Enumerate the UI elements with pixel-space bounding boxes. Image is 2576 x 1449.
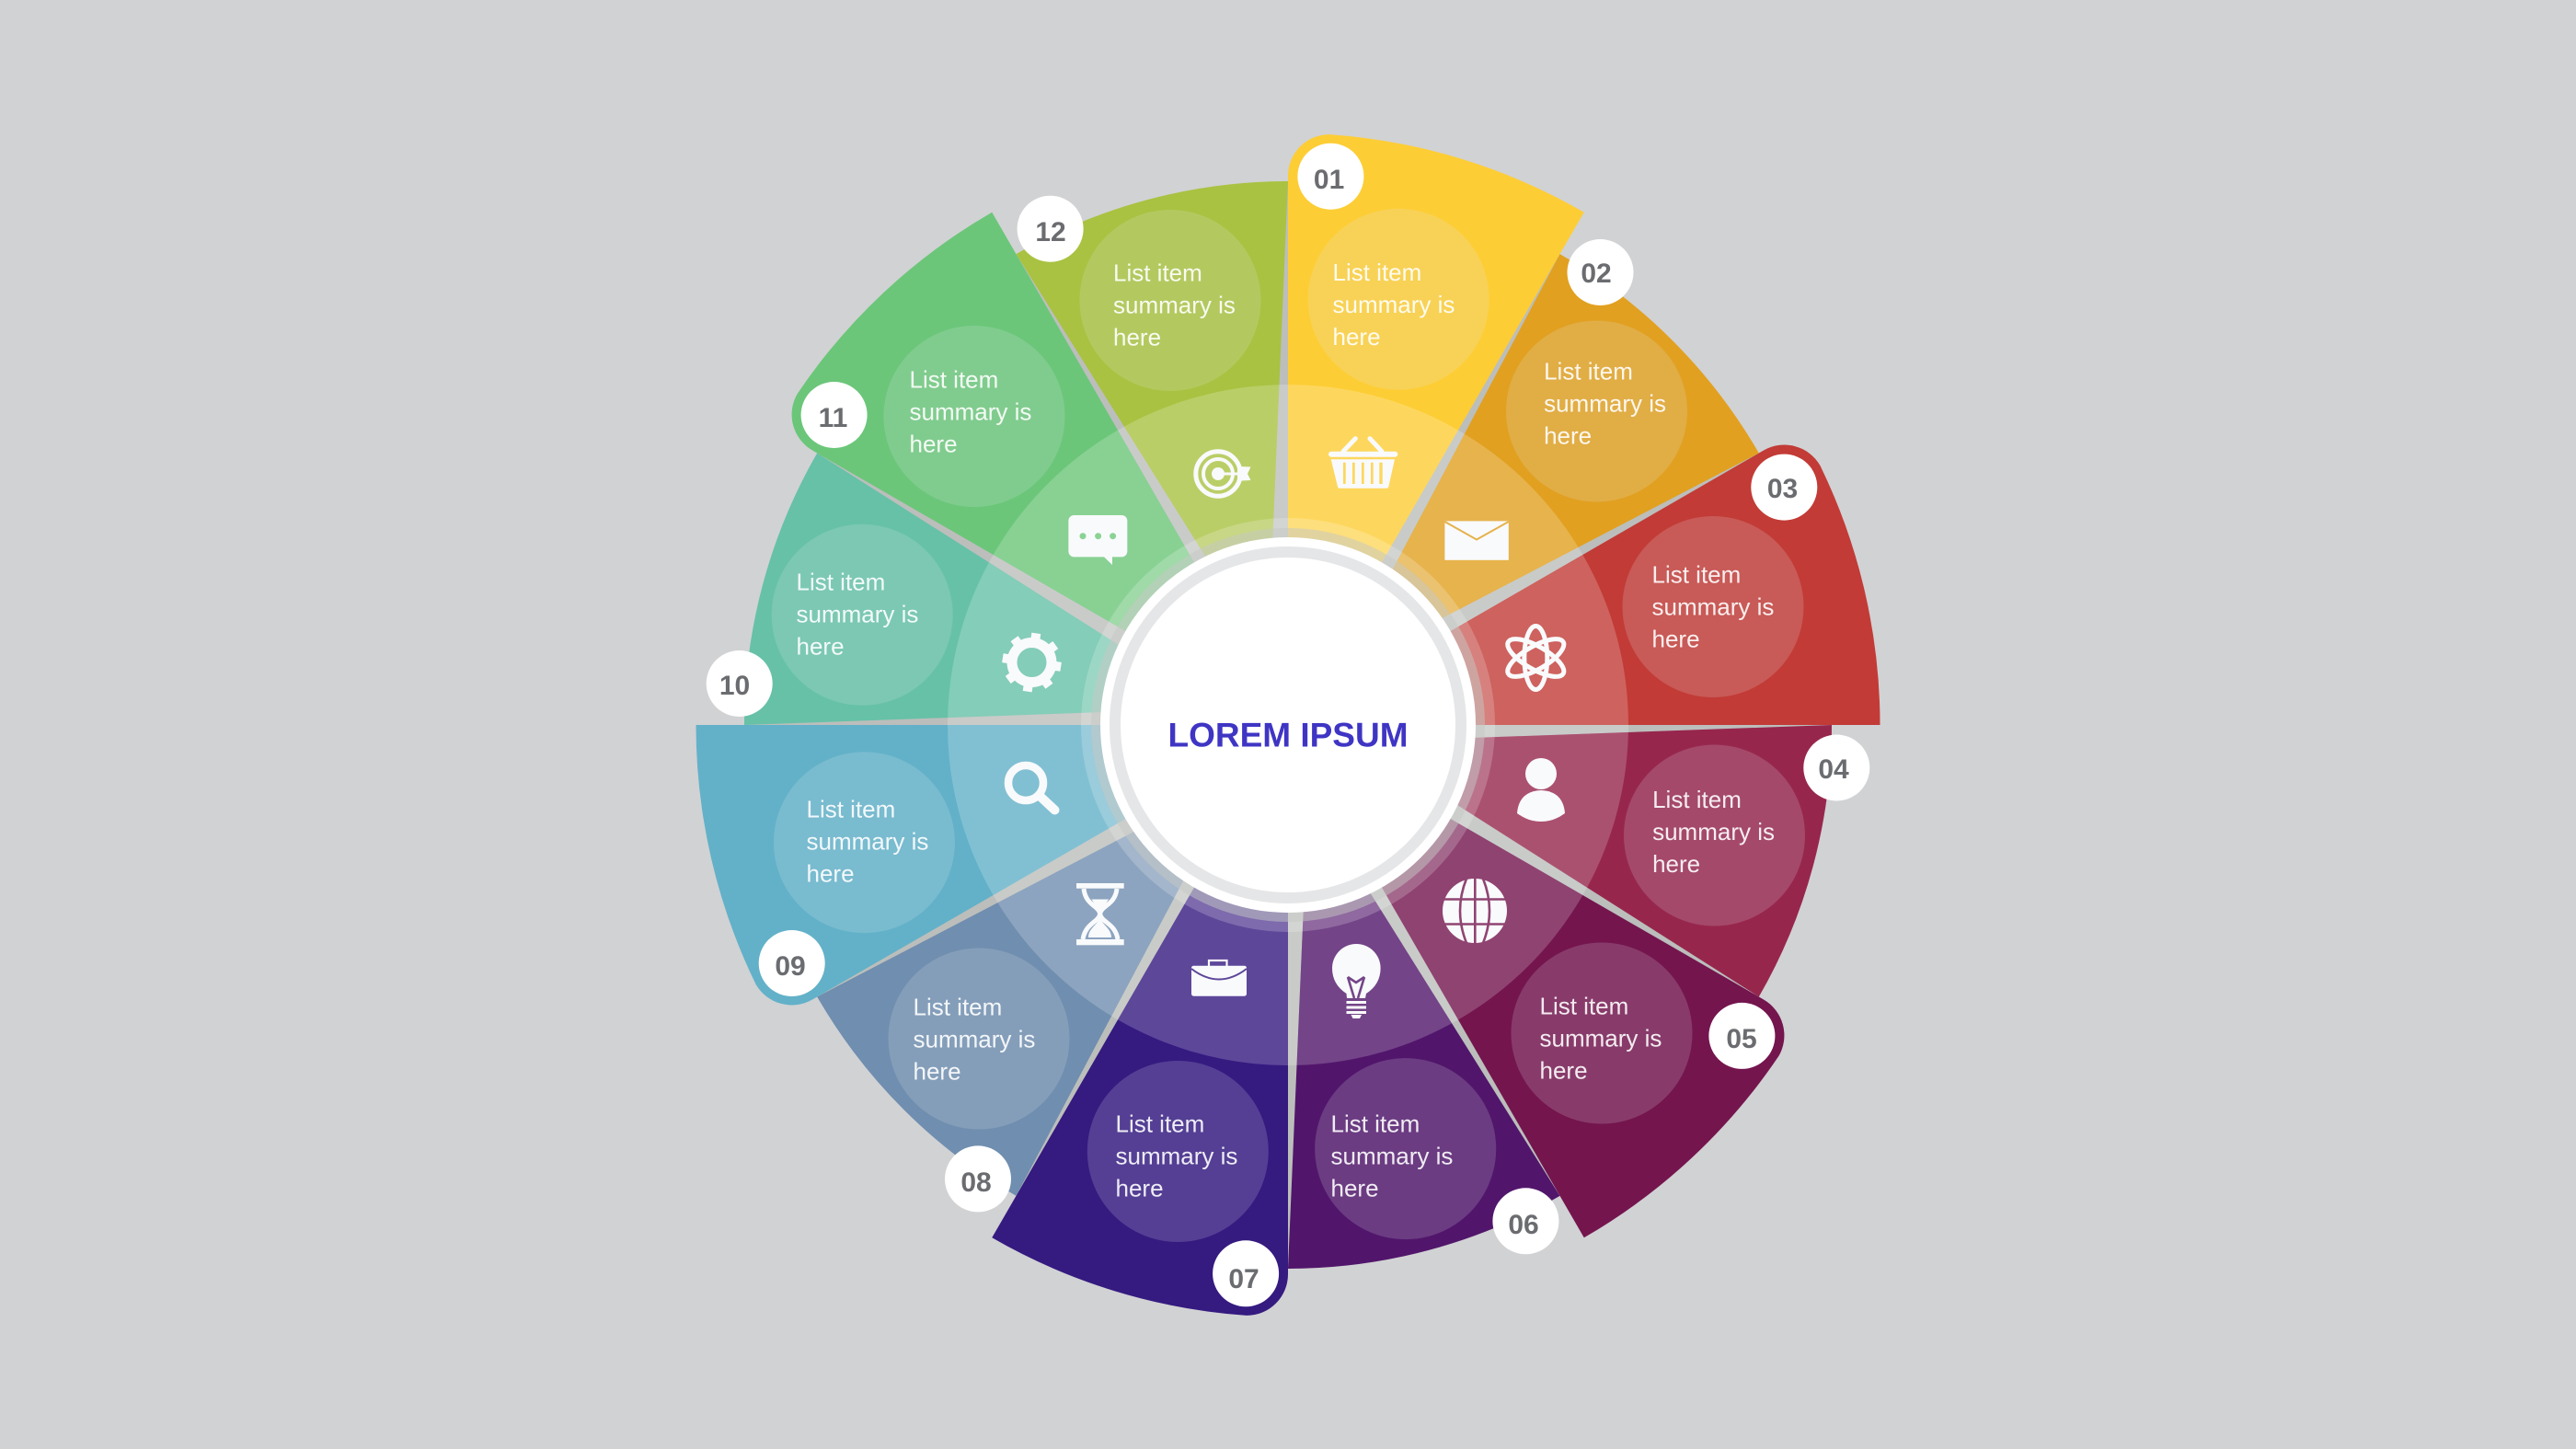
text 12: here — [1113, 324, 1161, 351]
text 02: here — [1544, 421, 1592, 449]
text 10: summary is — [797, 601, 918, 628]
panel: segment 10 — [707, 453, 1119, 725]
text 07: summary is — [1115, 1143, 1237, 1170]
panel: segment 01 — [1288, 134, 1584, 563]
text 08: summary is — [913, 1026, 1035, 1053]
center hub — [1081, 518, 1495, 932]
icon: target — [1196, 452, 1251, 496]
wedge 03 — [1412, 430, 1948, 910]
summary circle 08 — [889, 948, 1069, 1130]
wedge 09 — [628, 540, 1164, 1020]
text 03: List item — [1652, 560, 1741, 588]
wedge 10 — [744, 453, 1119, 725]
summary circle 09 — [774, 752, 955, 933]
panel: segment 12 — [1016, 181, 1288, 557]
panel: segment 07 — [992, 887, 1288, 1316]
wedge 04 — [1457, 725, 1832, 997]
summary circle 02 — [1506, 320, 1687, 502]
badge 04 — [1803, 734, 1869, 800]
wedge 12 — [1016, 118, 1439, 578]
wedge 01 — [1288, 134, 1584, 581]
summary circle 01 — [1308, 209, 1489, 390]
badge 12 — [1018, 196, 1084, 262]
badge 11 — [801, 382, 868, 448]
text 01: summary is — [1332, 291, 1455, 318]
icon: speech bubble — [1068, 515, 1127, 565]
panel: segment 06 — [1288, 893, 1560, 1269]
badge 07: 07 — [1228, 1264, 1259, 1294]
text 12: summary is — [1113, 292, 1236, 319]
text 08: here — [913, 1058, 961, 1086]
text 10: List item — [797, 569, 885, 596]
badge 09: 09 — [775, 951, 806, 982]
text 11: List item — [909, 366, 998, 394]
badge 06: 06 — [1508, 1210, 1539, 1240]
badge 09 — [759, 930, 825, 996]
badge 02: 02 — [1581, 259, 1612, 289]
summary circle 11 — [883, 326, 1065, 507]
icon: globe — [1443, 879, 1507, 943]
text 07: List item — [1115, 1110, 1204, 1138]
badge 07 — [1213, 1240, 1279, 1306]
icon: atom — [1502, 626, 1569, 690]
badge 01 — [1297, 144, 1363, 210]
summary circle 06 — [1315, 1058, 1496, 1239]
panel: segment 08 — [817, 832, 1183, 1213]
badge 08 — [945, 1145, 1011, 1212]
text 06: summary is — [1330, 1143, 1453, 1170]
badge 05 — [1708, 1003, 1775, 1069]
badge 10: 10 — [719, 671, 750, 701]
badge 06 — [1492, 1188, 1558, 1254]
wedge 06 — [1137, 872, 1560, 1332]
wedge 08 — [781, 736, 1203, 1196]
badge 11: 11 — [819, 403, 847, 433]
text 05: summary is — [1540, 1025, 1662, 1052]
panel: segment 04 — [1457, 725, 1869, 997]
text 10: here — [797, 633, 845, 661]
icon: hourglass — [1076, 883, 1124, 945]
summary circle 10 — [772, 524, 953, 706]
text 02: summary is — [1544, 389, 1666, 417]
summary circle 12 — [1080, 210, 1260, 391]
summary circle 04 — [1624, 745, 1805, 926]
wedge 05 — [1264, 797, 1800, 1277]
text 05: List item — [1540, 993, 1628, 1020]
wedge 02 — [1373, 254, 1795, 714]
wedge 11 — [776, 173, 1312, 653]
text 09: List item — [806, 796, 895, 823]
text 03: summary is — [1652, 592, 1774, 620]
text 06: List item — [1330, 1110, 1420, 1138]
badge 01: 01 — [1314, 165, 1344, 195]
text 11: summary is — [909, 398, 1031, 426]
text 09: summary is — [806, 828, 928, 856]
badge 10 — [707, 650, 773, 717]
text 04: summary is — [1652, 818, 1775, 845]
text 07: here — [1115, 1175, 1164, 1202]
badge 02 — [1568, 239, 1634, 305]
text 03: here — [1652, 625, 1700, 652]
text 08: List item — [913, 994, 1002, 1021]
summary circle 03 — [1623, 516, 1803, 697]
title: LOREM IPSUM — [1167, 716, 1409, 754]
text 01: here — [1332, 323, 1381, 351]
text 04: List item — [1652, 786, 1742, 813]
icon: person — [1517, 758, 1565, 822]
text 05: here — [1540, 1057, 1588, 1085]
summary circle 07 — [1087, 1061, 1269, 1242]
text 04: here — [1652, 850, 1700, 878]
panel: segment 03 — [1450, 445, 1880, 725]
icon: gear — [998, 629, 1065, 696]
icon: basket — [1328, 439, 1397, 489]
text 02: List item — [1544, 357, 1633, 385]
icon: briefcase — [1191, 960, 1247, 996]
text 01: List item — [1332, 259, 1421, 286]
badge 03 — [1751, 454, 1817, 521]
icon: light bulb — [1332, 944, 1381, 1018]
summary circle 05 — [1511, 942, 1693, 1124]
text 06: here — [1330, 1175, 1379, 1202]
panel: segment 02 — [1393, 239, 1759, 618]
panel: segment 05 — [1382, 819, 1785, 1238]
badge 12: 12 — [1035, 217, 1066, 247]
badge 04: 04 — [1818, 754, 1849, 785]
panel: segment 09 — [696, 725, 1126, 1005]
badge 08: 08 — [960, 1167, 992, 1198]
panel: segment 11 — [791, 212, 1194, 631]
text 11: here — [909, 431, 958, 458]
badge 05: 05 — [1726, 1024, 1757, 1054]
text 12: List item — [1113, 259, 1202, 287]
badge 03: 03 — [1767, 474, 1798, 504]
icon: envelope — [1444, 521, 1509, 560]
icon: magnifier — [1008, 765, 1054, 810]
text 09: here — [806, 860, 855, 888]
wedge 07 — [992, 868, 1288, 1316]
